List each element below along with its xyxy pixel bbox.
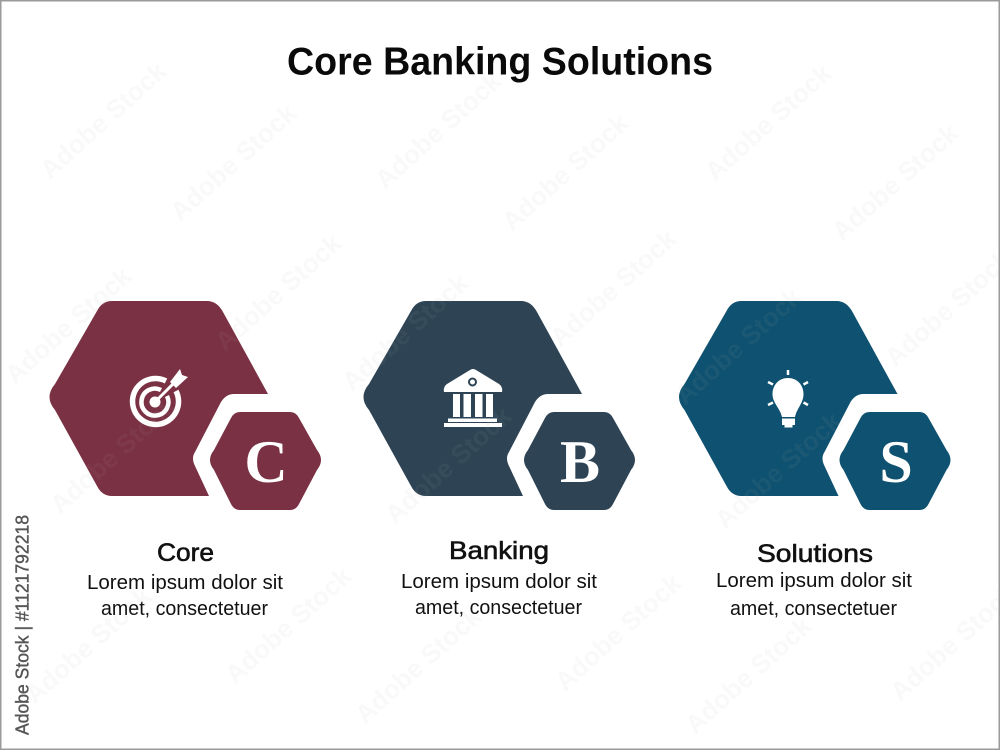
small hexagon: S — [840, 412, 950, 510]
heading: Banking: Banking — [449, 537, 549, 565]
description: Core: amet, consectetuer — [101, 598, 268, 620]
text: Adobe Stock — [209, 227, 348, 356]
text: Adobe Stock — [219, 560, 358, 689]
title: Core Banking Solutions — [287, 40, 713, 84]
panel: core — [50, 301, 321, 620]
large hexagon: core — [50, 301, 268, 496]
text: Adobe Stock — [379, 400, 518, 529]
text: Adobe Stock — [336, 267, 475, 396]
text: Adobe Stock — [826, 117, 965, 246]
heading: Core: Core — [157, 539, 214, 567]
text: Adobe Stock — [349, 600, 488, 729]
icon: light bulb — [768, 370, 808, 428]
text: Adobe Stock — [44, 390, 183, 519]
letter B: B — [560, 429, 600, 495]
description: Solutions: amet, consectetuer — [730, 598, 897, 620]
panel: solutions — [679, 301, 950, 620]
letter C: C — [244, 429, 288, 495]
text: Adobe Stock — [164, 97, 303, 226]
heading: Solutions: Solutions — [757, 540, 873, 568]
large hexagon: solutions — [679, 301, 898, 496]
description: Solutions: Lorem ipsum dolor sit — [716, 570, 912, 592]
description: Core: Lorem ipsum dolor sit — [87, 572, 283, 594]
text: Adobe Stock — [709, 405, 848, 534]
text: Adobe Stock — [34, 55, 173, 184]
text: Adobe Stock — [19, 580, 158, 709]
icon: target with arrow — [133, 369, 188, 424]
text: Adobe Stock — [679, 610, 818, 739]
description: Banking: Lorem ipsum dolor sit — [401, 571, 597, 593]
text: Adobe Stock — [369, 65, 508, 194]
letter S: S — [879, 429, 913, 495]
text: Adobe Stock — [669, 281, 808, 410]
text: Adobe Stock — [699, 57, 838, 186]
large hexagon: banking — [364, 301, 582, 496]
panel: banking — [364, 301, 635, 619]
text: Adobe Stock — [496, 107, 635, 236]
stock credit: Adobe Stock | #1121792218 — [12, 515, 32, 735]
description: Banking: amet, consectetuer — [415, 597, 582, 619]
text: Adobe Stock — [549, 567, 688, 696]
icon: bank building — [444, 369, 502, 427]
small hexagon: C — [210, 412, 321, 510]
text: Adobe Stock — [544, 223, 683, 352]
small hexagon: B — [524, 412, 635, 510]
text: Adobe Stock — [0, 260, 138, 389]
